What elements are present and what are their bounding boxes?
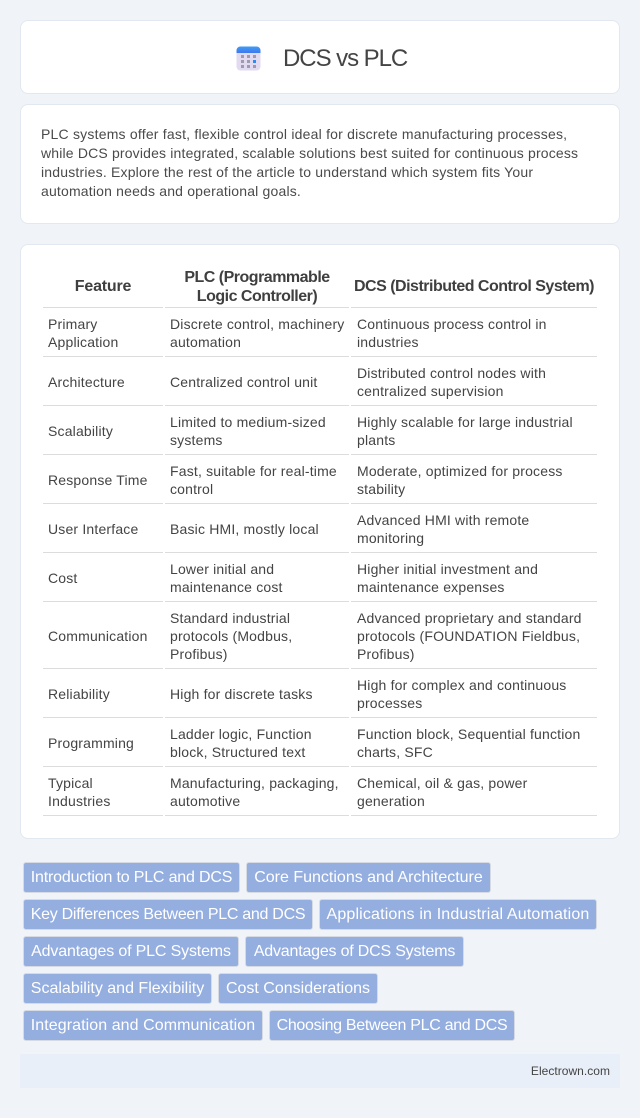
text: plants xyxy=(357,432,395,448)
row: Cost: Cost xyxy=(48,570,78,586)
row: Reliability: Reliability xyxy=(48,686,110,702)
chip xyxy=(218,973,378,1004)
intro text line 1: PLC systems offer fast, flexible control ideal for discrete manufacturing processes, xyxy=(41,126,567,142)
text: High for complex and continuous xyxy=(357,677,566,693)
text: protocols (Modbus, xyxy=(170,628,292,644)
text: maintenance expenses xyxy=(357,579,505,595)
text: Centralized control unit xyxy=(170,374,318,390)
text: Limited to medium-sized xyxy=(170,414,326,430)
text: automation xyxy=(170,334,241,350)
text: Lower initial and xyxy=(170,561,274,577)
chip xyxy=(269,1010,515,1041)
text: centralized supervision xyxy=(357,383,504,399)
text: Standard industrial xyxy=(170,610,290,626)
text: systems xyxy=(170,432,223,448)
text: monitoring xyxy=(357,530,424,546)
panel: comparison table xyxy=(20,244,620,839)
topic chips xyxy=(23,862,597,1041)
text: Continuous process control in xyxy=(357,316,547,332)
row: Response Time: Response Time xyxy=(48,472,148,488)
text: Advanced HMI with remote xyxy=(357,512,529,528)
chip: Core Functions and Architecture xyxy=(254,869,483,886)
chip xyxy=(246,862,491,893)
table header: DCS: DCS (Distributed Control System) xyxy=(354,278,594,295)
footer xyxy=(20,1054,620,1088)
text: maintenance cost xyxy=(170,579,283,595)
text: Chemical, oil & gas, power xyxy=(357,775,527,791)
chip xyxy=(319,899,597,930)
text: processes xyxy=(357,695,422,711)
chip xyxy=(245,936,464,967)
row: Typical Industries xyxy=(48,775,110,809)
text: Discrete control, machinery xyxy=(170,316,344,332)
row: Primary Application: Primary xyxy=(48,316,97,332)
row: Primary Application xyxy=(48,316,118,350)
intro text line 2: while DCS provides integrated, scalable solutions best suited for continuous process xyxy=(41,145,578,161)
chip: Key Differences Between PLC and DCS xyxy=(31,906,305,923)
text: Moderate, optimized for process xyxy=(357,463,563,479)
text: Highly scalable for large industrial xyxy=(357,414,573,430)
text: automotive xyxy=(170,793,240,809)
chip xyxy=(23,973,212,1004)
table header: PLC: Logic Controller) xyxy=(197,288,317,305)
text: Manufacturing, packaging, xyxy=(170,775,339,791)
table header: PLC: PLC (Programmable xyxy=(184,269,330,286)
chip xyxy=(23,862,240,893)
row: Typical Industries: Industries xyxy=(48,793,110,809)
text: charts, SFC xyxy=(357,744,433,760)
text: control xyxy=(170,481,213,497)
text: Profibus) xyxy=(170,646,228,662)
text: High for discrete tasks xyxy=(170,686,313,702)
row: Scalability: Scalability xyxy=(48,423,113,439)
chip: Advantages of PLC Systems xyxy=(31,943,231,960)
text: Higher initial investment and xyxy=(357,561,538,577)
row: Typical Industries: Typical xyxy=(48,775,93,791)
text: industries xyxy=(357,334,419,350)
chip: Scalability and Flexibility xyxy=(31,980,204,997)
chip: Introduction to PLC and DCS xyxy=(31,869,232,886)
text: protocols (FOUNDATION Fieldbus, xyxy=(357,628,580,644)
title: DCS vs PLC xyxy=(283,45,407,72)
chip xyxy=(23,936,239,967)
text: Ladder logic, Function xyxy=(170,726,312,742)
header card xyxy=(20,20,620,94)
row: User Interface: User Interface xyxy=(48,521,138,537)
chip xyxy=(23,1010,263,1041)
table header: Feature: Feature xyxy=(75,278,131,295)
chip xyxy=(23,899,313,930)
footer credit: Electrown.com xyxy=(531,1064,610,1078)
intro text line 4: automation needs and operational goals. xyxy=(41,183,301,199)
text: Distributed control nodes with xyxy=(357,365,546,381)
text: Profibus) xyxy=(357,646,415,662)
chip: Advantages of DCS Systems xyxy=(254,943,455,960)
icon: calendar xyxy=(236,46,260,70)
intro panel xyxy=(20,104,620,224)
text: Basic HMI, mostly local xyxy=(170,521,319,537)
chip: Cost Considerations xyxy=(226,980,370,997)
chip: Applications in Industrial Automation xyxy=(327,906,589,923)
text: stability xyxy=(357,481,405,497)
row: Programming: Programming xyxy=(48,735,134,751)
text: Advanced proprietary and standard xyxy=(357,610,582,626)
text: block, Structured text xyxy=(170,744,305,760)
intro text line 3: industries. Explore the rest of the article to understand which system fits Your xyxy=(41,164,533,180)
text: Function block, Sequential function xyxy=(357,726,580,742)
row: Architecture: Architecture xyxy=(48,374,125,390)
chip: Integration and Communication xyxy=(31,1017,255,1034)
chip: Choosing Between PLC and DCS xyxy=(277,1017,507,1034)
row: Communication: Communication xyxy=(48,628,148,644)
table header: PLC xyxy=(184,269,330,305)
text: generation xyxy=(357,793,425,809)
row: Primary Application: Application xyxy=(48,334,118,350)
text: Fast, suitable for real-time xyxy=(170,463,337,479)
